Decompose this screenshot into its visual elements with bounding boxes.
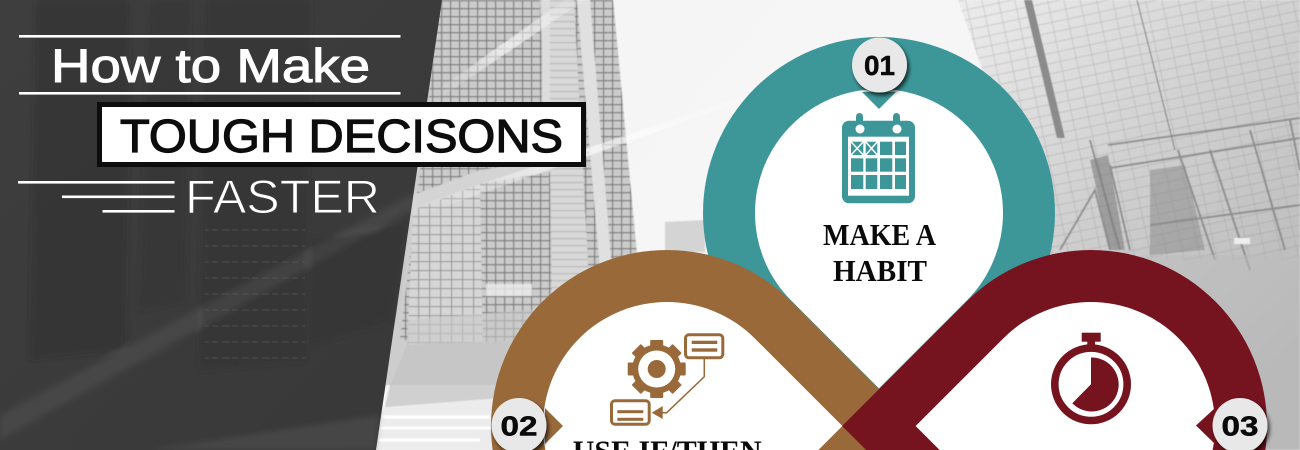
brown ring — [491, 250, 916, 450]
white interior — [916, 302, 1215, 450]
panel: 03 set a timer — [842, 250, 1268, 450]
label: make a habit: MAKE A — [823, 217, 937, 252]
label: make a habit — [823, 217, 937, 288]
heading: How to Make: How to Make — [51, 39, 370, 92]
badge pointer 01 — [862, 92, 896, 109]
speed lines — [18, 181, 174, 213]
title rule bottom — [19, 92, 400, 95]
title rule top — [19, 35, 400, 38]
badge 01 — [852, 38, 907, 92]
heading box: Tough Decisons: TOUGH DECISONS — [120, 110, 563, 162]
badge pointer 02 — [545, 408, 563, 444]
icon: gear with if/then boxes — [612, 335, 723, 424]
teal ring — [703, 37, 1055, 450]
badge 03: 03 — [1222, 410, 1258, 442]
badge 01: 01 — [864, 50, 895, 81]
badge 02: 02 — [500, 410, 538, 442]
badge 03 — [1212, 398, 1268, 450]
icon: calendar — [842, 113, 915, 203]
badge pointer 03 — [1196, 408, 1215, 444]
red ring — [842, 250, 1267, 450]
title block — [18, 35, 584, 223]
panel: 02 use if/then — [491, 250, 916, 450]
heading: Faster: FASTER — [185, 170, 380, 223]
panel: dark left overlay — [0, 0, 442, 450]
badge 02 — [492, 398, 546, 450]
background: left office tower photo — [370, 0, 775, 450]
background: right glass building photo — [958, 0, 1300, 450]
white interior — [543, 302, 842, 450]
panel: 01 make a habit — [703, 37, 1055, 450]
label: make a habit: HABIT — [833, 253, 927, 288]
white interior — [755, 89, 1003, 388]
icon: stopwatch — [1055, 333, 1127, 420]
